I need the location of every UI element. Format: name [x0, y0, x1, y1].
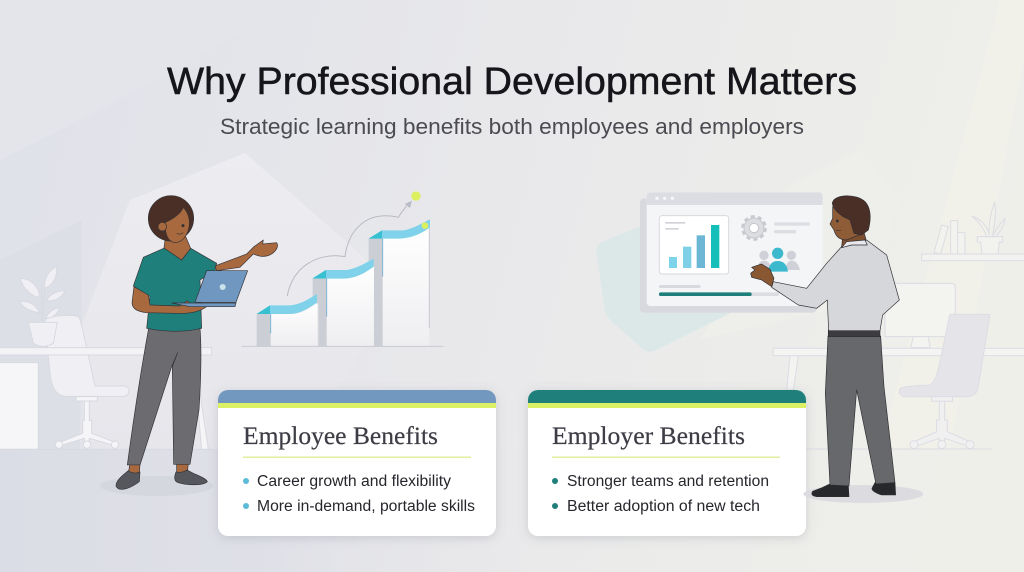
desk	[0, 348, 212, 355]
card heading: Employee Benefits	[243, 423, 438, 450]
bar chart	[659, 216, 729, 274]
bullet list: Stronger teams and retention	[567, 473, 769, 490]
bullet list: Better adoption of new tech	[567, 498, 760, 515]
chair	[899, 314, 990, 397]
dashboard screen	[640, 192, 823, 313]
shirt	[772, 240, 899, 331]
bullet list	[243, 473, 475, 515]
shoes	[812, 483, 896, 497]
bullet list: Career growth and flexibility	[257, 473, 451, 490]
people icon	[757, 248, 800, 272]
woman with laptop	[100, 196, 277, 496]
pants	[127, 328, 201, 465]
card heading: Employer Benefits	[552, 423, 745, 450]
shoes	[116, 470, 207, 489]
shirt	[133, 248, 217, 331]
legs	[128, 463, 188, 475]
subtitle: Strategic learning benefits both employees and employers	[220, 114, 804, 139]
laptop	[195, 271, 248, 302]
plant	[28, 322, 57, 346]
employee benefits card	[218, 390, 496, 536]
man presenting	[751, 196, 923, 503]
bullet list: More in-demand, portable skills	[257, 498, 475, 515]
progress bar	[659, 285, 779, 296]
shadow	[100, 476, 213, 496]
belt	[828, 330, 880, 337]
steps growth chart	[242, 191, 443, 346]
chair	[45, 315, 129, 396]
bullet list	[552, 473, 769, 515]
gear icon	[743, 217, 765, 239]
teal backdrop	[596, 225, 740, 352]
employer benefits card	[528, 390, 806, 536]
shadow	[803, 485, 923, 503]
arms	[215, 240, 277, 271]
neck and head	[164, 235, 191, 260]
cabinet	[0, 363, 38, 449]
monitor	[885, 283, 955, 337]
head	[842, 230, 866, 247]
pants	[825, 336, 895, 486]
hand	[751, 264, 774, 287]
right office background	[596, 202, 1024, 449]
left office background	[0, 267, 213, 449]
shelf	[922, 254, 1024, 261]
title: Why Professional Development Matters	[167, 61, 857, 103]
desk	[787, 356, 798, 390]
